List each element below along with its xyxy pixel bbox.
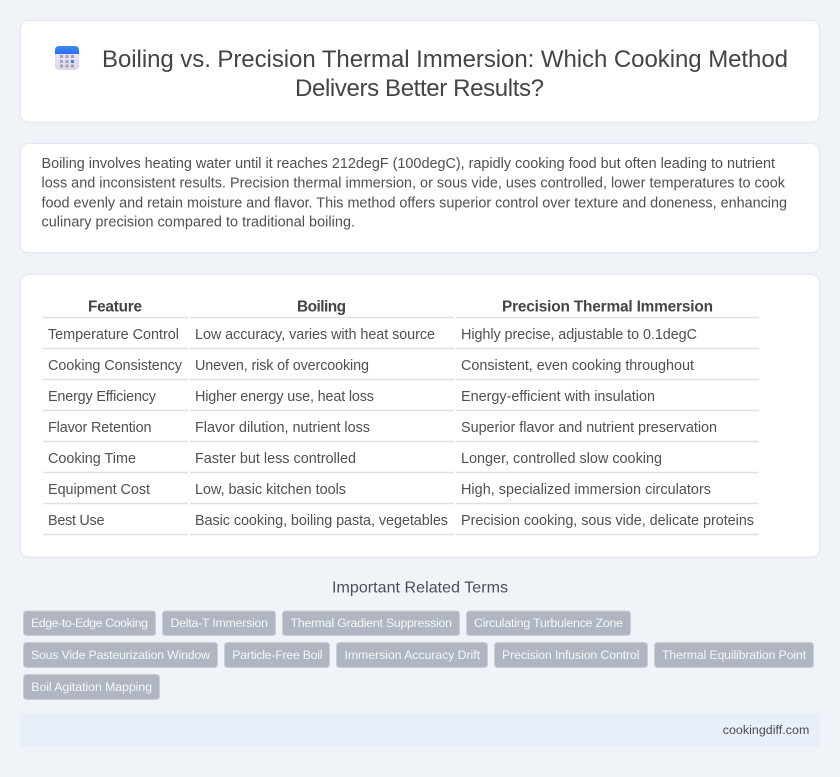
table row: energy efficiency: Energy Efficiency <box>48 389 157 405</box>
tag: particle-free boil: Particle-Free Boil <box>232 648 322 662</box>
table row: cooking time: Longer, controlled slow cooking <box>461 451 662 467</box>
table row: energy efficiency <box>43 389 759 410</box>
tag: boil agitation mapping <box>24 674 160 700</box>
table row: temperature control: Highly precise, adjustable to 0.1degC <box>461 327 697 343</box>
table row: cooking time <box>43 451 759 472</box>
table row: equipment cost: Equipment Cost <box>48 482 150 498</box>
tag: thermal equilibration point: Thermal Equilibration Point <box>662 648 807 662</box>
panel: header <box>20 20 820 122</box>
tag: thermal gradient suppression: Thermal Gradient Suppression <box>290 616 452 630</box>
tag: edge-to-edge cooking <box>24 611 156 636</box>
table row: cooking consistency: Consistent, even cooking throughout <box>461 358 694 374</box>
table row: cooking time: Cooking Time <box>48 451 136 467</box>
table row: energy efficiency: Higher energy use, heat loss <box>195 389 374 405</box>
table row: energy efficiency: Energy-efficient with insulation <box>461 389 655 405</box>
heading: related terms: Important Related Terms <box>332 580 508 596</box>
tag: edge-to-edge cooking: Edge-to-Edge Cooking <box>31 616 148 630</box>
title: Delivers Better Results? <box>295 75 544 102</box>
title <box>102 46 788 102</box>
tag: sous vide pasteurization window: Sous Vide Pasteurization Window <box>31 648 210 662</box>
tag: delta-t immersion: Delta-T Immersion <box>170 616 268 630</box>
footer <box>20 713 820 747</box>
tag: particle-free boil <box>224 642 330 668</box>
table row: flavor retention: Flavor Retention <box>48 420 152 436</box>
panel: related term tags <box>24 611 814 700</box>
tag: immersion accuracy drift <box>336 642 488 668</box>
text block: description: loss and inconsistent results. Precision thermal immersion, or sous vide, uses controlled, lower temperatures to cook <box>42 176 786 192</box>
table row: flavor retention: Superior flavor and nutrient preservation <box>461 420 717 436</box>
table row: flavor retention: Flavor dilution, nutrient loss <box>195 420 370 436</box>
table row: cooking consistency: Cooking Consistency <box>48 358 183 374</box>
table row: temperature control <box>43 327 759 348</box>
panel: introduction <box>20 144 820 252</box>
tag: delta-t immersion <box>162 611 276 636</box>
tag: thermal gradient suppression <box>282 611 460 636</box>
tag: thermal equilibration point <box>654 642 814 668</box>
table row: best use <box>43 513 759 534</box>
tag: precision infusion control <box>494 642 648 668</box>
table row: temperature control: Low accuracy, varies with heat source <box>195 327 435 343</box>
table header row <box>43 298 759 318</box>
table header row: Precision Thermal Immersion <box>502 298 713 316</box>
text block: description: culinary precision compared to traditional boiling. <box>42 214 355 230</box>
text block: description: food evenly and retain moisture and flavor. This method offers superior control over texture and doneness, enhancing <box>42 196 787 212</box>
panel: comparison table <box>20 274 820 557</box>
tag: boil agitation mapping: Boil Agitation Mapping <box>31 680 152 694</box>
title: Boiling vs. Precision Thermal Immersion: Which Cooking Method <box>102 46 788 73</box>
table row: equipment cost: High, specialized immersion circulators <box>461 482 711 498</box>
text block: description <box>42 156 787 230</box>
table header row: Feature <box>88 298 142 316</box>
tag: circulating turbulence zone: Circulating Turbulence Zone <box>474 616 623 630</box>
tag: precision infusion control: Precision Infusion Control <box>502 648 640 662</box>
table row: temperature control: Temperature Control <box>48 327 179 343</box>
table row: flavor retention <box>43 420 759 442</box>
footer: cookingdiff.com <box>723 723 809 737</box>
table row: best use: Precision cooking, sous vide, delicate proteins <box>461 513 754 529</box>
icon: calendar <box>55 46 79 70</box>
table row: cooking time: Faster but less controlled <box>195 451 356 467</box>
table row: equipment cost <box>43 482 759 504</box>
table header row: Boiling <box>297 298 346 316</box>
text block: description: Boiling involves heating water until it reaches 212degF (100degC), rapidly cooking food but often leading to nutrient <box>42 156 775 172</box>
tag: immersion accuracy drift: Immersion Accuracy Drift <box>344 648 481 662</box>
table row: best use: Basic cooking, boiling pasta, vegetables <box>195 513 448 529</box>
table row: equipment cost: Low, basic kitchen tools <box>195 482 346 498</box>
table row: best use: Best Use <box>48 513 104 529</box>
table row: cooking consistency <box>43 358 759 380</box>
tag: sous vide pasteurization window <box>24 642 218 668</box>
table row: cooking consistency: Uneven, risk of overcooking <box>195 358 369 374</box>
tag: circulating turbulence zone <box>466 611 630 636</box>
